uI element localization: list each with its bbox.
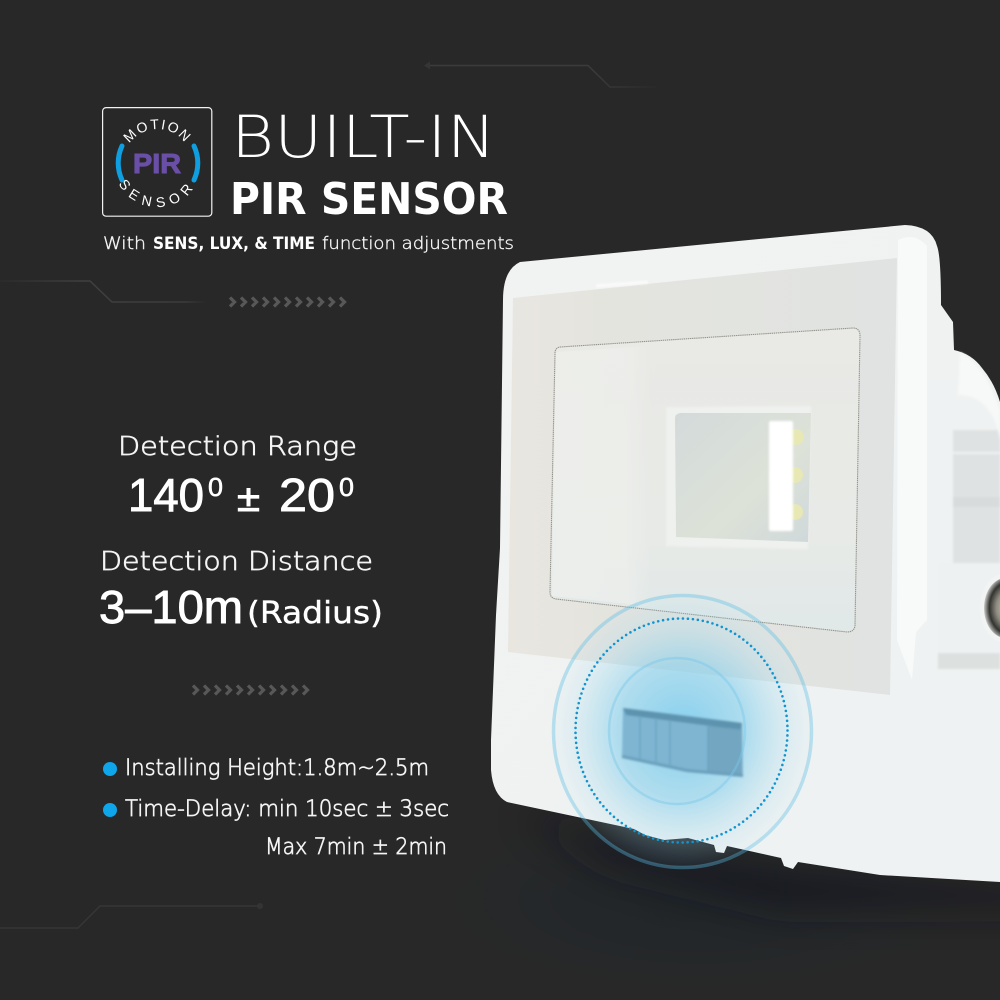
central panel (550, 328, 860, 632)
subtitle (103, 234, 514, 254)
glare on lens (596, 282, 648, 286)
detection range value: 0 (339, 472, 354, 502)
blue glow (553, 595, 811, 867)
badge text: PIR: PIR (133, 148, 181, 179)
circuit line: bottom (0, 903, 263, 928)
detection range value: 140 (128, 469, 204, 521)
title: PIR sensor: PIR SENSOR (230, 174, 508, 225)
side screw (980, 574, 1000, 642)
product: floodlight (491, 225, 1000, 910)
badge frame (103, 108, 212, 216)
textured side strip (897, 237, 927, 680)
badge: motion PIR sensor (102, 107, 212, 217)
detection range value: ± (237, 478, 260, 520)
detection range value: 20 (279, 469, 335, 521)
subtitle: function adjustments (322, 234, 514, 254)
subtitle: SENS, LUX, & TIME (153, 234, 315, 254)
floor shadow beneath product (400, 795, 1000, 1000)
badge text: motion: MOTION (123, 119, 191, 142)
title: built-in: BUILT-IN (231, 103, 496, 171)
lens cover (508, 258, 897, 695)
bullet: time-delay min: Time-Delay: min 10sec ± 3sec (125, 797, 449, 822)
badge blue bracket: left (118, 146, 122, 180)
time-delay max: Max 7min ± 2min (265, 835, 447, 860)
dotted ring (576, 618, 788, 842)
detection distance value (99, 581, 383, 633)
detection distance label: Detection Distance (100, 547, 373, 577)
detection range label: Detection Range (118, 432, 357, 462)
badge blue bracket: right (194, 146, 198, 180)
chevron row: lower (193, 686, 308, 694)
housing (491, 225, 1000, 882)
detection range value (128, 469, 354, 521)
product shadow (520, 815, 1000, 910)
outer ring (554, 596, 812, 868)
detection distance value: 3–10m (99, 581, 243, 633)
detection distance value: (Radius) (247, 596, 383, 631)
LED window surround (666, 406, 811, 549)
chevron row: upper (230, 298, 344, 306)
circuit line: top (424, 62, 656, 87)
detection range value: 0 (208, 472, 223, 502)
inner ring (609, 658, 745, 804)
panel left highlight (552, 346, 650, 606)
sensor lens (622, 708, 743, 777)
circuit line: left (0, 281, 205, 302)
LED yellow dots (787, 429, 804, 520)
LED window (675, 413, 811, 542)
bullet: installing height: Installing Height:1.8m~2.5m (125, 756, 429, 781)
subtitle: With (103, 234, 146, 254)
badge text: sensor: SENSOR (120, 180, 193, 208)
LED reflection (769, 421, 793, 531)
bracket shadows (938, 352, 1000, 669)
